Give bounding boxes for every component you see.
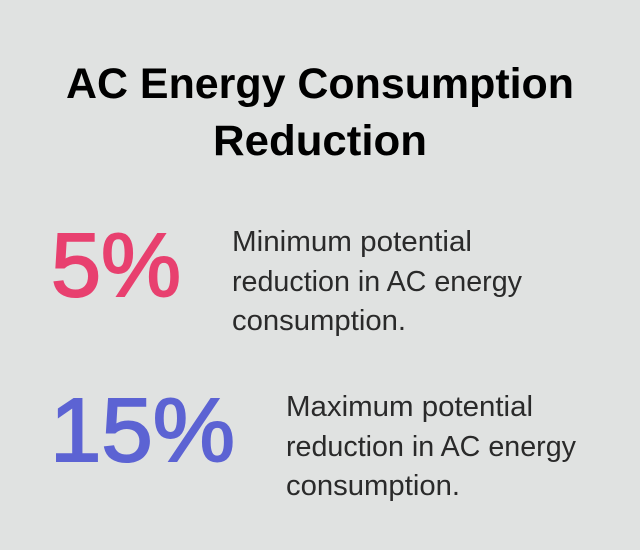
- stat description: maximum: consumption.: [286, 470, 460, 502]
- stat description: maximum: Maximum potential: [286, 391, 533, 423]
- stat description: minimum: Minimum potential: [232, 226, 472, 258]
- title: [66, 60, 574, 165]
- title: AC Energy Consumption: [66, 60, 574, 108]
- title: Reduction: [213, 117, 427, 165]
- stat description: maximum: [286, 391, 576, 502]
- stat value: 5%: 5%: [51, 216, 181, 316]
- stat value: 15%: 15%: [50, 381, 235, 481]
- stat: 5 percent minimum: [51, 216, 522, 337]
- stat: 15 percent maximum: [50, 381, 576, 502]
- stat description: maximum: reduction in AC energy: [286, 431, 576, 463]
- stat description: minimum: reduction in AC energy: [232, 266, 522, 298]
- stat description: minimum: consumption.: [232, 305, 406, 337]
- stat description: minimum: [232, 226, 522, 337]
